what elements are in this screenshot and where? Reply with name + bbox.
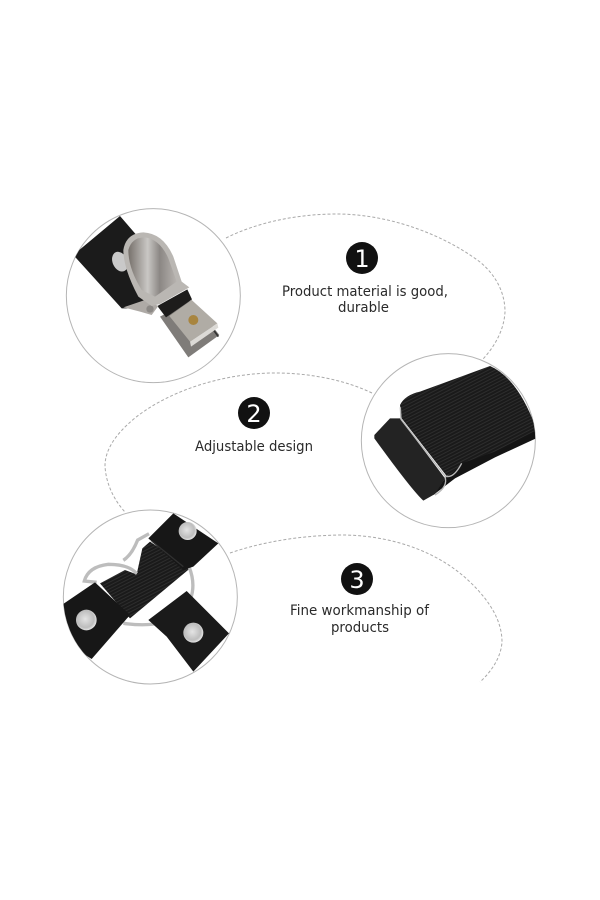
- clip top plate: [169, 300, 217, 342]
- feature 1: [282, 242, 448, 316]
- top strap crease: [152, 541, 183, 567]
- number badge 2: 2: [246, 400, 262, 428]
- metal slider: [400, 407, 462, 495]
- feature 3: [290, 563, 430, 636]
- clip spring cup: [123, 232, 189, 306]
- feature 2: [195, 397, 313, 455]
- brass hole: [188, 315, 198, 325]
- infographic canvas: [62, 208, 536, 684]
- number badge 3: [341, 563, 373, 595]
- clip jaw gap: [157, 289, 192, 317]
- left strap: [62, 582, 130, 659]
- right strap: [148, 591, 229, 672]
- number badge 1: 1: [354, 245, 370, 273]
- elastic ribbon: [100, 542, 190, 618]
- feature 3 text: products: [331, 620, 389, 636]
- band underside: [433, 428, 538, 495]
- left rivet: [76, 610, 97, 630]
- photo circle 2: elastic band with slider: [361, 354, 538, 528]
- top rivet: [179, 522, 197, 540]
- strap rivet: [112, 252, 126, 272]
- feature 2 text: Adjustable design: [195, 439, 313, 455]
- right rivet: [183, 623, 203, 643]
- clip cup inner: [128, 237, 177, 297]
- heart ring: [84, 534, 193, 625]
- feature 3 text: Fine workmanship of: [290, 603, 430, 619]
- top strap: [148, 513, 218, 570]
- clip pin: [214, 331, 218, 337]
- photo circle 3: heart ring with leather straps: [62, 510, 237, 684]
- photo circle 1: metal suspender clip: [66, 209, 240, 383]
- feature 1 text: durable: [338, 300, 389, 316]
- dashed outline: feature 3: [230, 535, 502, 682]
- feature 1 text: Product material is good,: [282, 284, 448, 300]
- clip front edge: [190, 323, 218, 347]
- hinge: [123, 300, 158, 315]
- number badge 1: [346, 242, 378, 274]
- elastic band: [400, 366, 537, 476]
- dashed outline: feature 2: [105, 373, 372, 512]
- number badge 3: 3: [349, 566, 365, 594]
- lower clip plate: [160, 300, 219, 357]
- leather fold: [374, 418, 445, 501]
- leather strap: [75, 216, 144, 308]
- dashed outline: feature 1: [226, 214, 505, 359]
- hinge bolt: [146, 305, 154, 313]
